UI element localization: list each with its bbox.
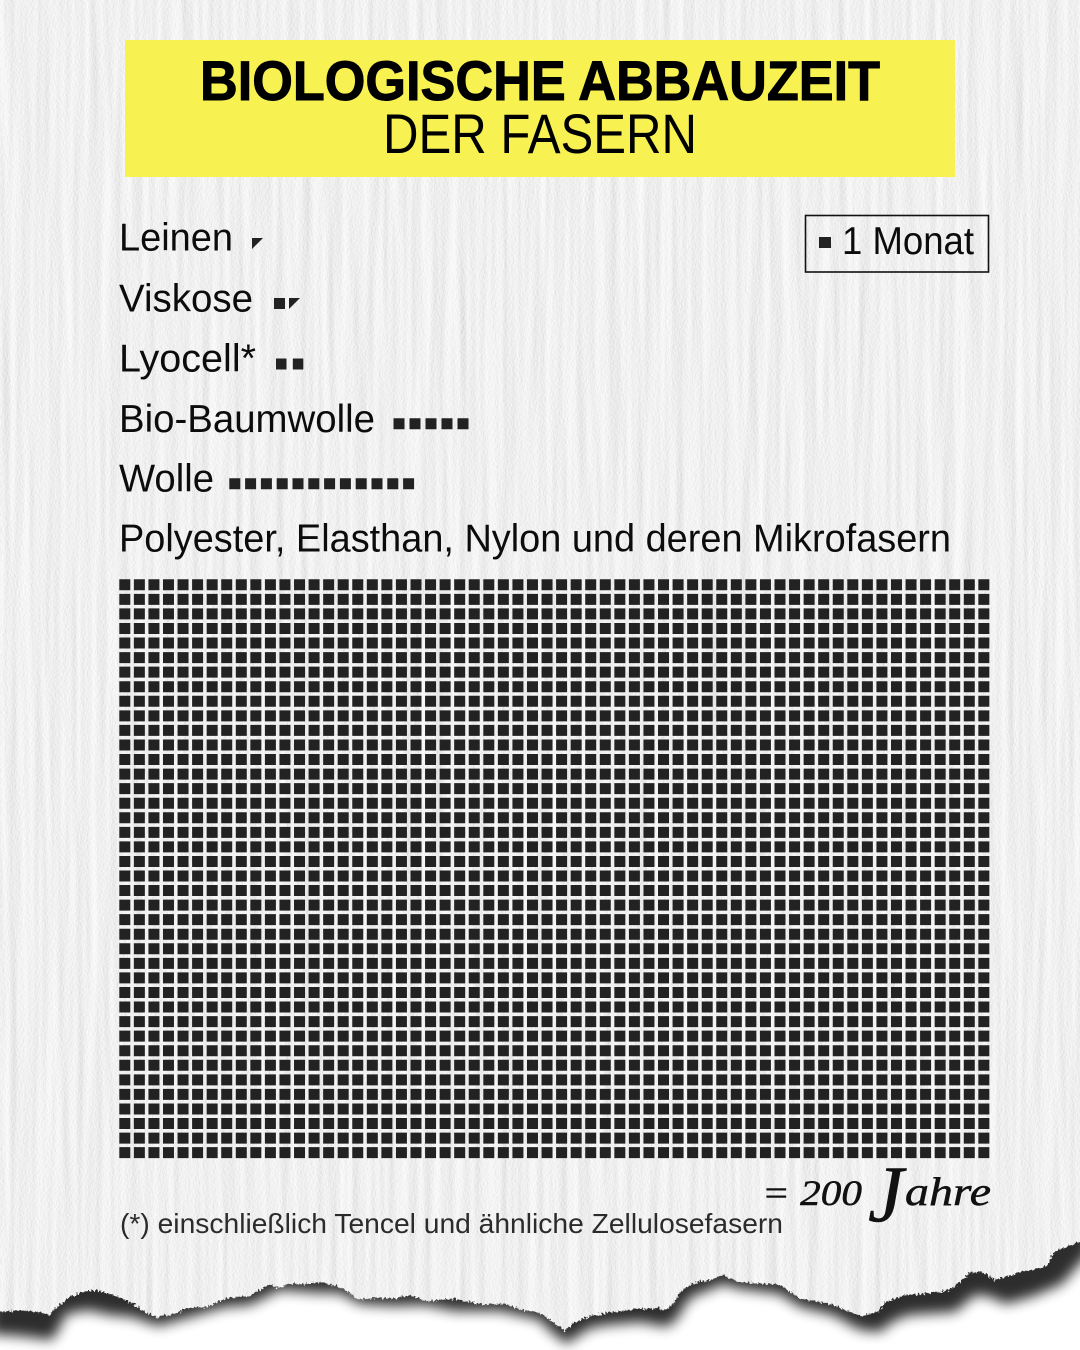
row: Wolle: Wolle — [119, 458, 214, 500]
title banner — [125, 40, 955, 177]
title line 1: BIOLOGISCHE ABBAUZEIT — [200, 49, 880, 112]
legend: 1 Monat: 1 Monat — [842, 220, 974, 263]
handwritten note: = 200 Jahre — [762, 1151, 991, 1239]
row: Bio-Baumwolle: Bio-Baumwolle — [119, 398, 375, 441]
handwritten note: = 200 Jahre: = 200 — [762, 1173, 862, 1213]
torn paper shadow — [0, 1200, 1080, 1344]
footnote: (*) einschließlich Tencel und ähnliche Zellulosefasern — [120, 1208, 783, 1239]
title line 2: DER FASERN — [383, 102, 697, 165]
handwritten note: = 200 Jahre: ahre — [905, 1169, 991, 1214]
row: Leinen: Leinen — [119, 216, 233, 260]
row: Viskose: Viskose — [119, 278, 253, 320]
handwritten note: = 200 Jahre: J — [868, 1151, 907, 1239]
unit chart: 60 x 40 squares — [119, 585, 990, 1153]
row label: Polyester, Elasthan, Nylon und deren Mikrofasern: Polyester, Elasthan, Nylon und deren Mikrofasern — [119, 518, 951, 560]
row: Lyocell: Lyocell* — [119, 338, 256, 380]
legend: 1 Monat — [806, 216, 988, 272]
